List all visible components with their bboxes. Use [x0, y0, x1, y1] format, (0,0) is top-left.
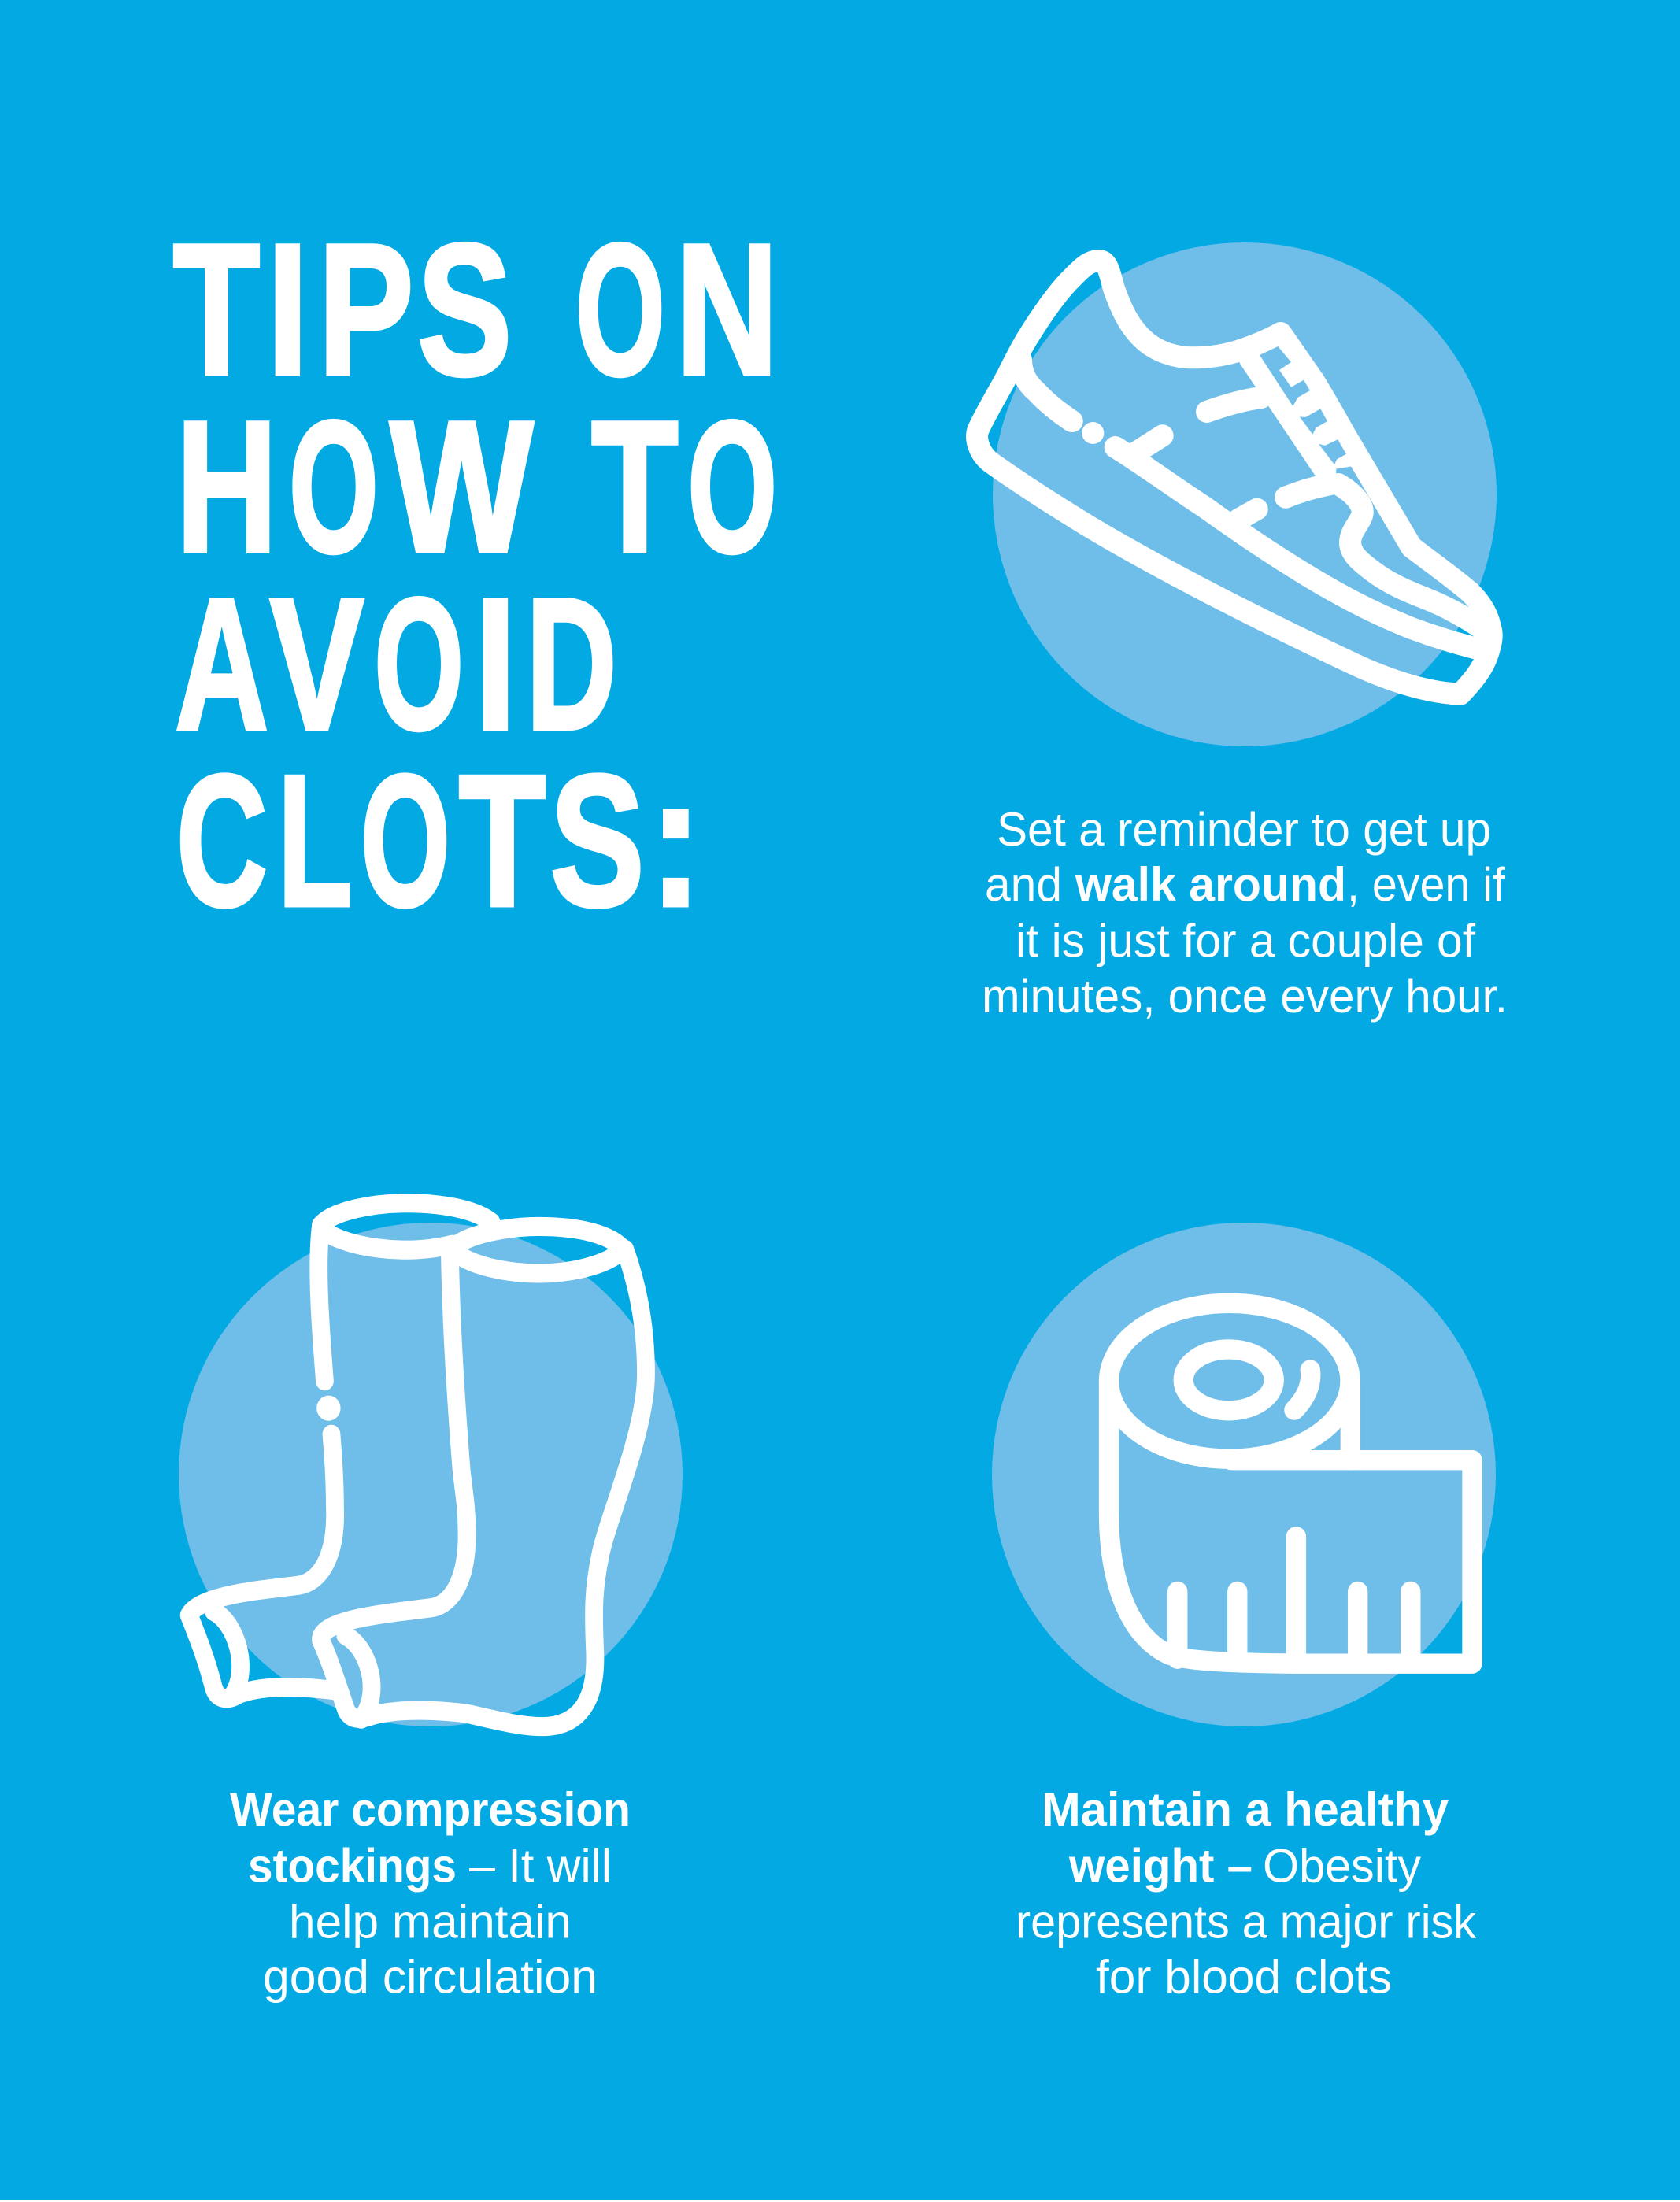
panel: healthy weight [992, 1223, 1496, 2004]
panel: compression stockings [179, 1203, 683, 2004]
title: O [289, 383, 379, 592]
text: healthy weight tip: for blood clots [1096, 1951, 1392, 2004]
text: walk around tip: and [985, 858, 1062, 911]
eyelet dot [1082, 422, 1104, 444]
lace gap two [1300, 409, 1327, 435]
title: D [526, 561, 617, 768]
text: healthy weight tip: Maintain a healthy [1042, 1783, 1449, 1836]
title: S [550, 737, 645, 946]
text: walk around tip: walk around [1075, 858, 1346, 911]
title: N [675, 206, 778, 414]
title: H [176, 383, 277, 592]
icon: sneaker [977, 261, 1492, 694]
lace gap three [1319, 439, 1346, 464]
title: T [591, 383, 679, 592]
text: compression stockings tip [230, 1783, 631, 2004]
title: O [687, 383, 777, 592]
text: compression stockings tip: – It will [469, 1840, 612, 1893]
title: W [390, 383, 534, 592]
title: O [575, 206, 665, 414]
lace panel fill [1249, 333, 1363, 471]
text: walk around tip: Set a reminder to get up [997, 803, 1491, 856]
title [173, 206, 778, 946]
title: A [175, 561, 268, 768]
lace gap one [1260, 346, 1310, 406]
title: T [173, 206, 260, 414]
title: I [475, 561, 516, 768]
icon: measuring tape [1109, 1303, 1472, 1664]
circle backdrop: tape [992, 1223, 1496, 1726]
text: walk around tip [982, 803, 1508, 1023]
circle backdrop: shoe [993, 242, 1497, 746]
text: compression stockings tip: good circulation [263, 1951, 598, 2004]
text: healthy weight tip: Obesity [1263, 1840, 1421, 1893]
title: P [318, 206, 414, 414]
text: walk around tip: , even if [1347, 858, 1505, 911]
title: V [270, 561, 364, 768]
icon: stockings [189, 1203, 646, 1726]
text: walk around tip: minutes, once every hour. [982, 970, 1508, 1023]
circle backdrop: stockings [179, 1223, 683, 1726]
text: healthy weight tip: represents a major risk [1016, 1896, 1477, 1948]
text: compression stockings tip: Wear compression [230, 1783, 631, 1836]
title: I [267, 206, 309, 414]
text: compression stockings tip: stockings [248, 1840, 457, 1893]
panel: walk around [977, 242, 1508, 1023]
title: C [176, 737, 268, 946]
text: healthy weight tip [1016, 1783, 1477, 2004]
text: healthy weight tip: weight – [1068, 1840, 1253, 1893]
title: O [374, 561, 464, 768]
title: T [459, 737, 546, 946]
text: walk around tip: it is just for a couple of [1016, 915, 1475, 968]
title: S [417, 206, 512, 414]
title: O [361, 737, 450, 946]
text: compression stockings tip: help maintain [289, 1896, 572, 1948]
title: L [278, 737, 353, 946]
title: : [649, 737, 702, 946]
